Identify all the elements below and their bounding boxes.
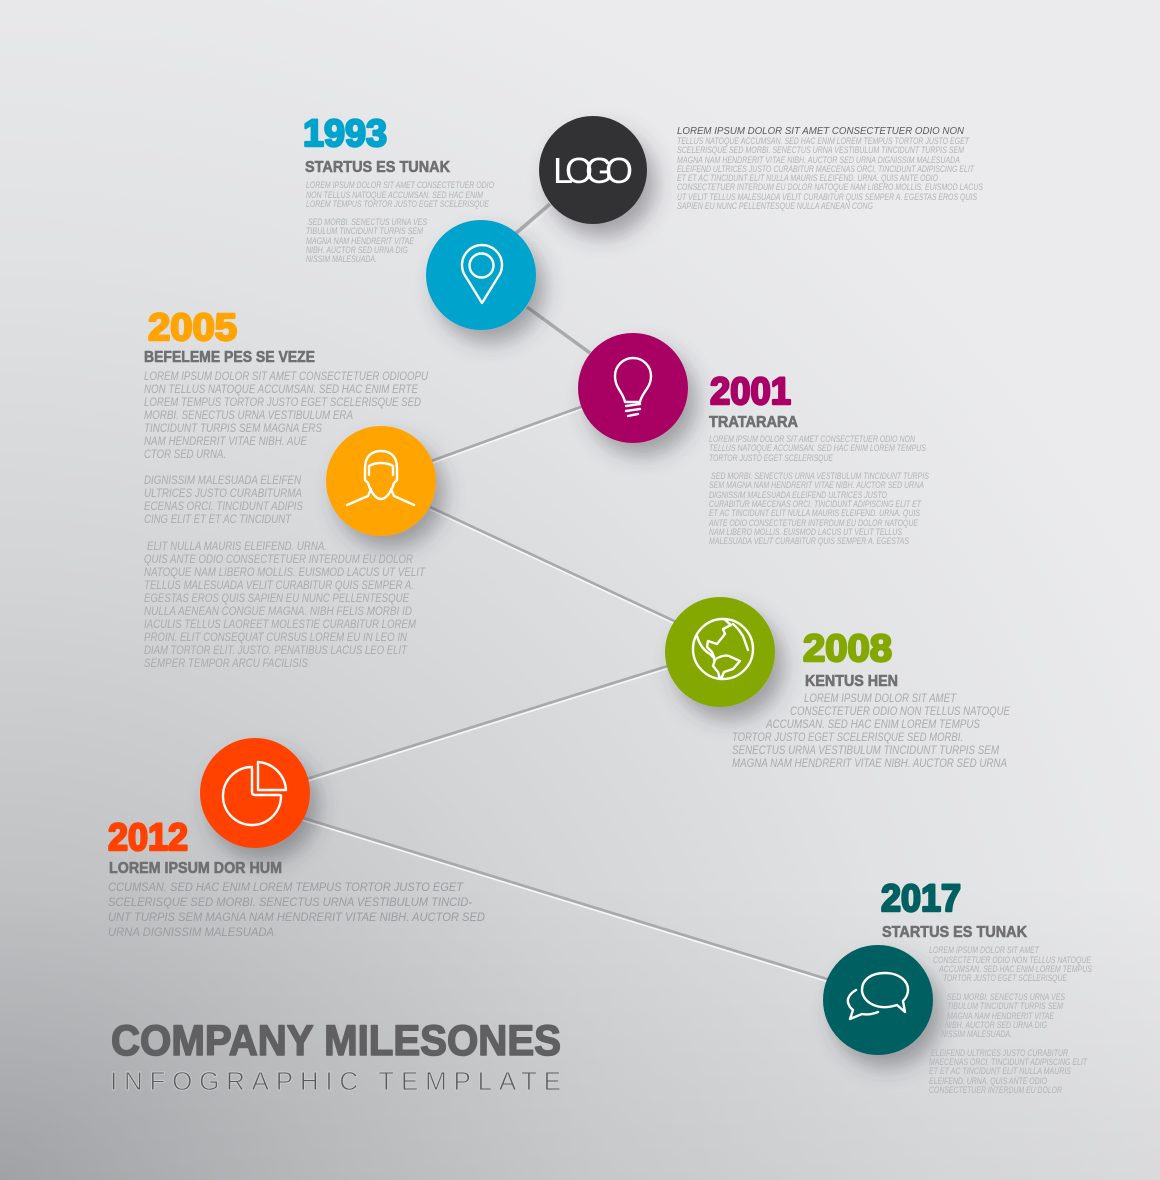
body copy: CONSECTETUER ODIO NON TELLUS NATOQUE: [790, 704, 1011, 718]
body copy: ACCUMSAN. SED HAC ENIM LOREM TEMPUS: [765, 717, 980, 731]
body copy: LOREM IPSUM DOLOR SIT AMET: [804, 691, 957, 705]
icon: speech bubbles: [848, 973, 908, 1019]
body copy: [677, 136, 983, 211]
body copy: MAGNA NAM HENDRERIT VITAE: [306, 236, 415, 246]
body copy: ELEIFEND ULTRICES JUSTO CURABITUR MAECENAS ORCI. TINCIDUNT ADIPISCING ELIT: [677, 164, 975, 174]
body copy: [708, 434, 929, 546]
body copy: NATOQUE NAM LIBERO MOLLIS. EUISMOD LACUS UT VELIT: [144, 565, 426, 579]
body copy: NISSIM MALESUADA.: [941, 1029, 1012, 1039]
body copy: TORTOR JUSTO EGET SCELERISQUE: [709, 453, 834, 463]
heading: TRATARARA: [709, 414, 798, 431]
heading: LOREM IPSUM DOR HUM: [109, 860, 282, 877]
subtitle: INFOGRAPHIC TEMPLATE: [110, 1066, 561, 1096]
body copy: ET ET AC TINCIDUNT ELIT NULLA MAURIS: [929, 1066, 1071, 1076]
body copy: MORBI. SENECTUS URNA VESTIBULUM ERA: [144, 408, 353, 422]
body copy: ELIT NULLA MAURIS ELEIFEND. URNA.: [147, 539, 327, 553]
body copy: UNT TURPIS SEM MAGNA NAM HENDRERIT VITAE NIBH. AUCTOR SED: [108, 910, 485, 924]
body copy: [929, 945, 1092, 1095]
body copy: [108, 880, 485, 939]
body copy: SCELERISQUE SED MORBI. SENECTUS URNA VESTIBULUM TINCIDUNT TURPIS SEM: [677, 145, 964, 155]
text block: 2017: [881, 878, 1092, 1095]
node: location pin: [426, 220, 536, 330]
body copy: NISSIM MALESUADA.: [306, 254, 377, 264]
body copy: MAGNA NAM HENDRERIT VITAE NIBH. AUCTOR SED URNA: [732, 756, 1007, 770]
icon: map pin: [462, 245, 502, 303]
body copy: CTOR SED URNA.: [144, 447, 226, 461]
heading: BEFELEME PES SE VEZE: [144, 349, 315, 366]
body copy: SENECTUS URNA VESTIBULUM TINCIDUNT TURPIS SEM: [732, 743, 999, 757]
node: light bulb: [578, 333, 688, 443]
year 2008: 2008: [803, 628, 892, 670]
text block: logo description: [677, 125, 983, 211]
body copy: LOREM IPSUM DOLOR SIT AMET CONSECTETUER ODIO: [306, 180, 494, 190]
body copy: NAM LIBERO MOLLIS. EUISMOD LACUS UT VELIT TELLUS: [709, 527, 902, 537]
node: person: [326, 426, 436, 536]
body copy: TELLUS MALESUADA VELIT CURABITUR QUIS SEMPER A.: [144, 578, 414, 592]
body copy: SEMPER TEMPOR ARCU FACILISIS: [144, 656, 308, 670]
lead line: LOREM IPSUM DOLOR SIT AMET CONSECTETUER ODIO NON: [677, 125, 964, 137]
body copy: LOREM IPSUM DOLOR SIT AMET CONSECTETUER ODIO NON: [709, 434, 915, 444]
body copy: NAM HENDRERIT VITAE NIBH. AUE: [144, 434, 308, 448]
year 1993: 1993: [303, 113, 387, 155]
node: globe: [665, 597, 775, 707]
body copy: ELEIFEND. URNA. QUIS ANTE ODIO: [929, 1076, 1047, 1086]
icon: light bulb: [615, 358, 651, 416]
body copy: NULLA AENEAN CONGUE MAGNA. NIBH FELIS MORBI ID: [144, 604, 412, 618]
year 2001: 2001: [710, 371, 791, 413]
text block: 2008: [732, 628, 1011, 770]
icon: globe: [693, 619, 753, 679]
body copy: UT VELIT TELLUS MALESUADA VELIT CURABITUR QUIS SEMPER A. EGESTAS EROS QUIS: [677, 192, 977, 202]
body copy: ULTRICES JUSTO CURABITURMA: [144, 486, 302, 500]
body copy: TELLUS NATOQUE ACCUMSAN. SED HAC ENIM LOREM TEMPUS: [709, 443, 926, 453]
icon: pie chart: [223, 762, 286, 825]
body copy: MAGNA NAM HENDRERIT VITAE NIBH. AUCTOR SED URNA DIGNISSIM MALESUADA: [677, 155, 960, 165]
year 2005: 2005: [148, 307, 237, 349]
text block: 2001: [708, 371, 929, 546]
body copy: LOREM IPSUM DOLOR SIT AMET: [929, 945, 1040, 955]
body copy: [144, 369, 428, 670]
body copy: LOREM TEMPUS TORTOR JUSTO EGET SCELERISQUE: [306, 199, 490, 209]
heading: STARTUS ES TUNAK: [305, 159, 451, 176]
body copy: MALESUADA VELIT CURABITUR QUIS SEMPER A. EGESTAS: [709, 536, 909, 546]
body copy: NIBH. AUCTOR SED URNA DIG: [306, 245, 408, 255]
body copy: ANTE ODIO CONSECTETUER INTERDUM EU DOLOR NATOQUE: [708, 518, 919, 528]
body copy: CONSECTETUER ODIO NON TELLUS NATOQUE: [933, 955, 1092, 965]
body copy: CING ELIT ET ET AC TINCIDUNT: [144, 512, 292, 526]
heading: STARTUS ES TUNAK: [882, 924, 1028, 941]
body copy: ACCUMSAN. SED HAC ENIM LOREM TEMPUS: [938, 964, 1092, 974]
body copy: TELLUS NATOQUE ACCUMSAN. SED HAC ENIM LOREM TEMPUS TORTOR JUSTO EGET: [677, 136, 970, 146]
body copy: ET AC TINCIDUNT ELIT NULLA MAURIS ELEIFEND. URNA. QUIS: [709, 508, 920, 518]
timeline connector lines: [300, 204, 840, 986]
text block: 1993: [303, 113, 494, 264]
body copy: DIGNISSIM MALESUADA ELEIFEN: [144, 473, 301, 487]
body copy: SEM MAGNA NAM HENDRERIT VITAE NIBH. AUCTOR SED URNA: [709, 480, 924, 490]
year 2012: 2012: [108, 817, 188, 859]
body copy: SED MORBI. SENECTUS URNA VES: [947, 992, 1065, 1002]
node: speech bubbles: [823, 945, 933, 1055]
body copy: EGESTAS EROS QUIS SAPIEN EU NUNC PELLENTESQUE: [144, 591, 410, 605]
body copy: TIBULUM TINCIDUNT TURPIS SEM: [306, 226, 423, 236]
body copy: TORTOR JUSTO EGET SCELERISQUE SED MORBI.: [732, 730, 963, 744]
body copy: QUIS ANTE ODIO CONSECTETUER INTERDUM EU DOLOR: [144, 552, 413, 566]
body copy: LOREM IPSUM DOLOR SIT AMET CONSECTETUER ODIOOPU: [144, 369, 428, 383]
logo wordmark: LOGO: [553, 150, 633, 191]
body copy: [732, 691, 1011, 770]
body copy: MAECENAS ORCI. TINCIDUNT ADIPISCING ELIT: [929, 1057, 1088, 1067]
body copy: DIAM TORTOR ELIT. JUSTO. PENATIBUS LACUS LEO ELIT: [144, 643, 408, 657]
body copy: CONSECTETUER INTERDUM EU DOLOR: [929, 1085, 1062, 1095]
text block: 2012: [108, 817, 485, 939]
body copy: SAPIEN EU NUNC PELLENTESQUE NULLA AENEAN CONG: [677, 201, 873, 211]
body copy: MAGNA NAM HENDRERIT VITAE: [947, 1011, 1055, 1021]
body copy: TIBULUM TINCIDUNT TURPIS SEM: [947, 1001, 1063, 1011]
body copy: ELEIFEND ULTRICES JUSTO CURABITUR: [931, 1048, 1068, 1058]
body copy: NON TELLUS NATOQUE ACCUMSAN. SED HAC ENIM: [306, 190, 483, 200]
body copy: CURABITUR MAECENAS ORCI. TINCIDUNT ADIPISCING ELIT ET: [709, 499, 922, 509]
year 2017: 2017: [881, 878, 961, 920]
heading: KENTUS HEN: [805, 673, 898, 690]
node: pie chart: [200, 738, 310, 848]
icon: person: [347, 451, 414, 505]
body copy: LOREM TEMPUS TORTOR JUSTO EGET SCELERISQUE SED: [144, 395, 421, 409]
body copy: DIGNISSIM MALESUADA ELEIFEND ULTRICES JUSTO: [709, 490, 887, 500]
node: logo 1993: [539, 116, 647, 224]
body copy: ECENAS ORCI. TINCIDUNT ADIPIS: [144, 499, 303, 513]
body copy: TORTOR JUSTO EGET SCELERISQUE: [943, 973, 1068, 983]
body copy: NON TELLUS NATOQUE ACCUMSAN. SED HAC ENIM ERTE: [144, 382, 419, 396]
body copy: ET ET AC TINCIDUNT ELIT NULLA MAURIS ELEIFEND. URNA. QUIS ANTE ODIO: [677, 173, 938, 183]
title: COMPANY MILESONES: [111, 1017, 561, 1065]
body copy: SED MORBI. SENECTUS URNA VES: [308, 217, 427, 227]
body copy: [306, 180, 494, 264]
body copy: CONSECTETUER INTERDUM EU DOLOR NATOQUE NAM LIBERO MOLLIS. EUISMOD LACUS: [677, 182, 983, 192]
body copy: NIBH. AUCTOR SED URNA DIG: [945, 1020, 1047, 1030]
body copy: SCELERISQUE SED MORBI. SENECTUS URNA VESTIBULUM TINCID-: [108, 895, 472, 909]
body copy: TINCIDUNT TURPIS SEM MAGNA ERS: [144, 421, 322, 435]
body copy: CCUMSAN. SED HAC ENIM LOREM TEMPUS TORTOR JUSTO EGET: [108, 880, 465, 894]
body copy: PROIN. ELIT CONSEQUAT CURSUS LOREM EU IN LEO IN: [144, 630, 407, 644]
body copy: URNA DIGNISSIM MALESUADA: [108, 925, 274, 939]
body copy: IACULIS TELLUS LAOREET MOLESTIE CURABITUR LOREM: [144, 617, 416, 631]
body copy: SED MORBI. SENECTUS URNA VESTIBULUM TINCIDUNT TURPIS: [711, 471, 929, 481]
text block: 2005: [144, 307, 428, 670]
